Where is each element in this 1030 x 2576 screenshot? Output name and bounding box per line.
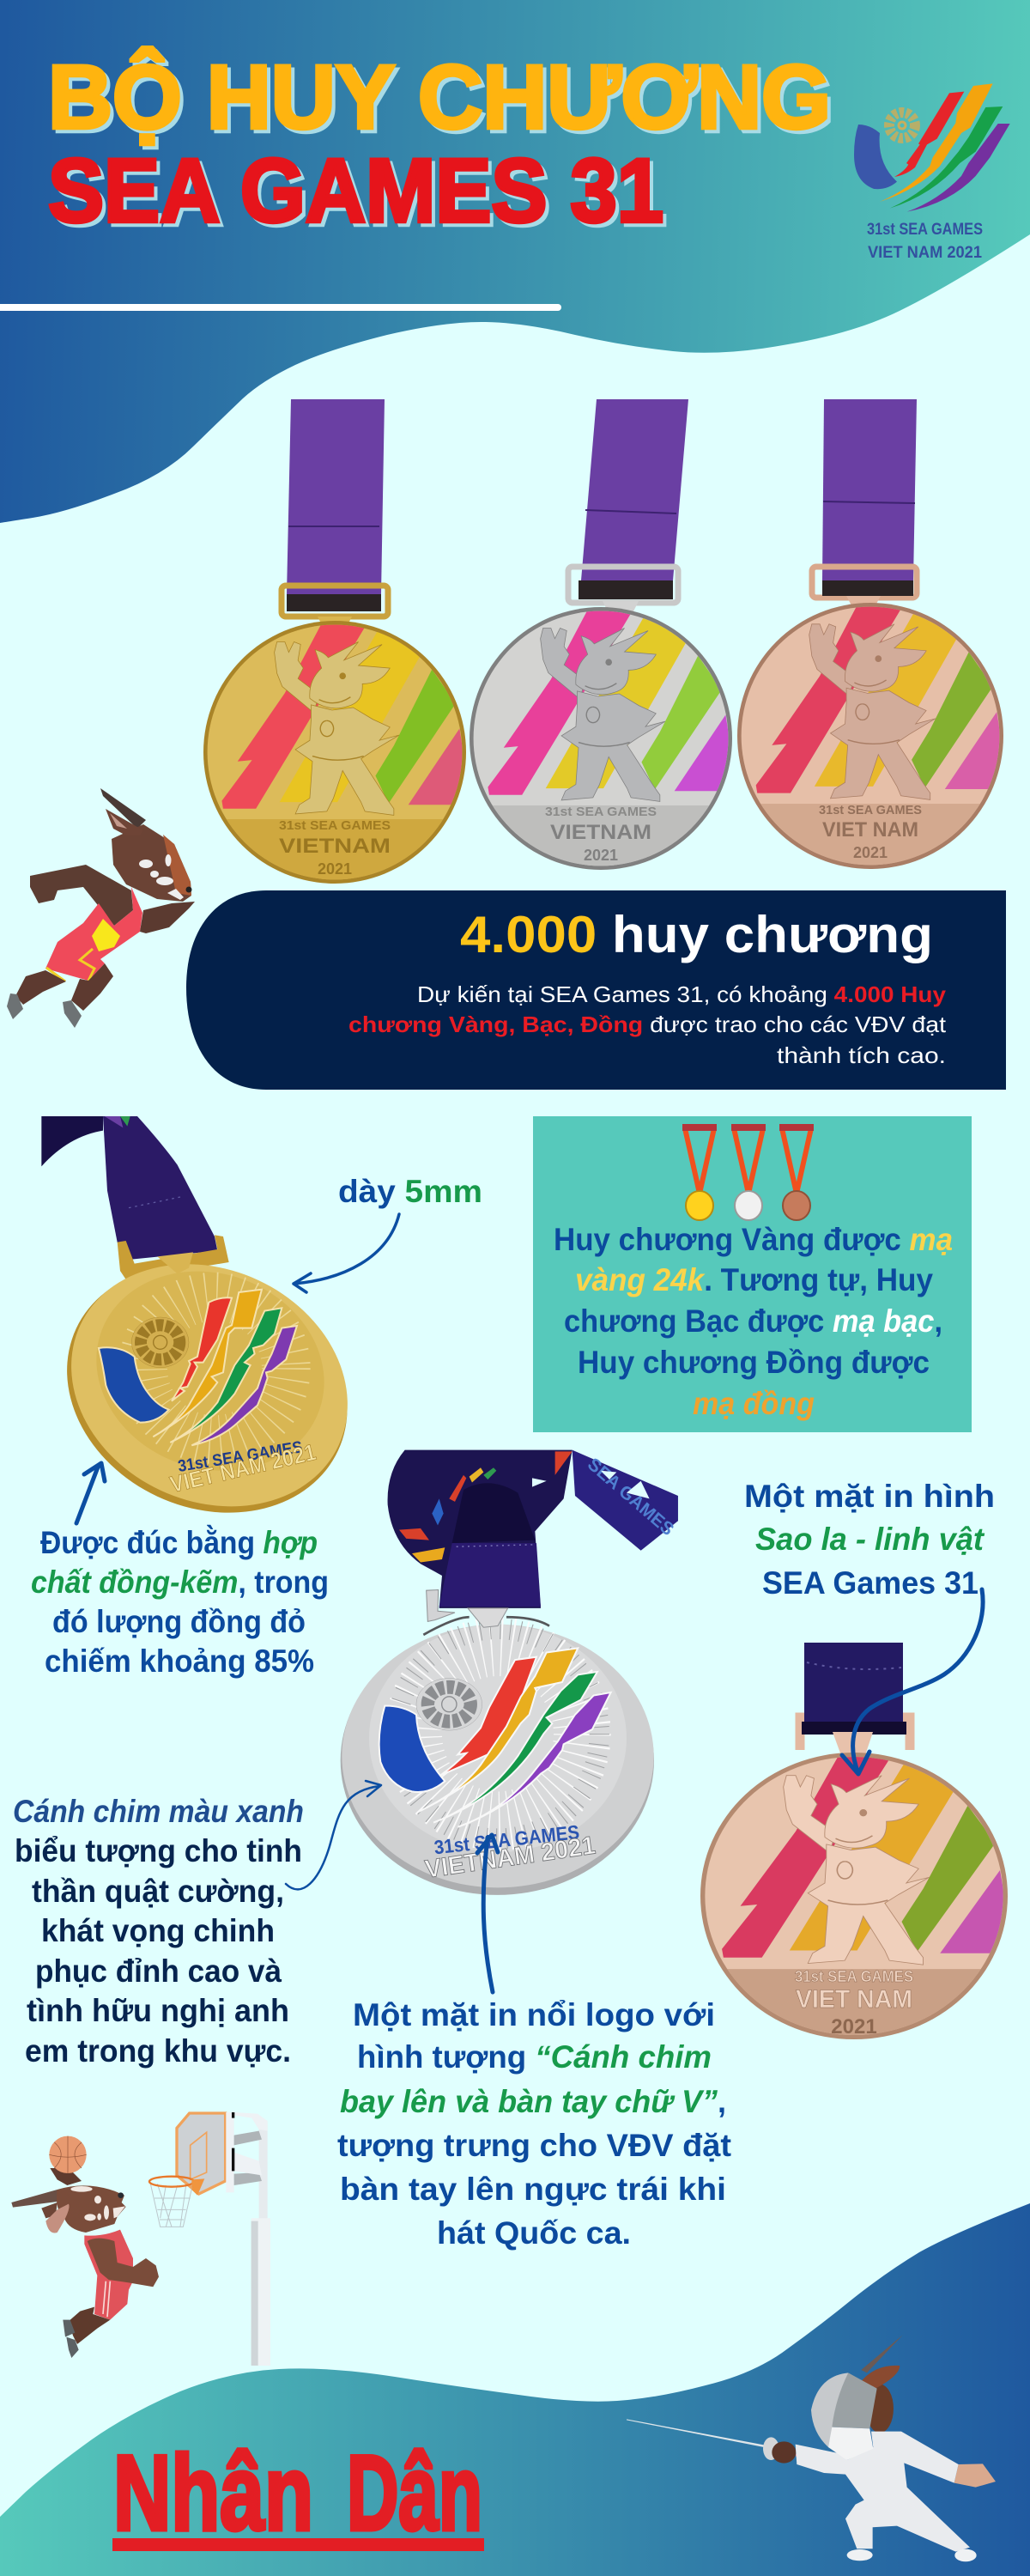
callout: blue wing: tình hữu nghị anh xyxy=(27,1993,289,2028)
mascot: fencer xyxy=(627,2335,996,2561)
bronze medal: VIET NAM xyxy=(822,818,918,841)
silver medal xyxy=(470,399,732,872)
footer wave xyxy=(0,2203,1030,2576)
silver logo medal xyxy=(341,1450,678,1895)
plating text xyxy=(554,1222,953,1421)
title line 1: BỘ HUY CHƯƠNG xyxy=(48,46,831,148)
callout: mascot face: SEA Games 31 xyxy=(762,1565,978,1601)
panel text: Dự kiến tại SEA Games 31, có khoảng 4.000 Huy xyxy=(417,981,947,1007)
bronze mascot medal xyxy=(700,1643,1008,2041)
callout: logo face: bay lên và bàn tay chữ V”, xyxy=(340,2084,726,2119)
panel text xyxy=(348,981,947,1068)
silver medal: VIETNAM xyxy=(550,821,651,844)
callout: logo face: tượng trưng cho VĐV đặt xyxy=(337,2128,731,2163)
bronze medal xyxy=(737,399,1003,871)
plating text: vàng 24k. Tương tự, Huy xyxy=(575,1262,933,1297)
panel heading: 4.000 huy chương xyxy=(460,906,933,963)
arrow xyxy=(76,1463,105,1523)
callout: day 5mm: dày 5mm xyxy=(338,1174,482,1209)
gold medal: 31st SEA GAMES xyxy=(279,818,391,833)
callout: mascot face: Một mặt in hình xyxy=(744,1479,995,1514)
callout: blue wing: thần quật cường, xyxy=(32,1874,284,1909)
panel text: chương Vàng, Bạc, Đồng được trao cho các VĐV đạt xyxy=(348,1012,947,1037)
panel: plating note xyxy=(533,1116,972,1432)
callout: blue wing xyxy=(13,1781,381,2069)
callout: alloy: chất đồng-kẽm, trong xyxy=(31,1564,329,1600)
bronze medal: 2021 xyxy=(853,844,888,861)
callout: mascot face xyxy=(744,1479,995,1601)
bronze mascot medal: 2021 xyxy=(831,2015,877,2038)
icon: three medals xyxy=(682,1124,814,1220)
gold medal xyxy=(203,399,466,885)
callout: alloy: đó lượng đồng đỏ xyxy=(52,1604,306,1639)
silver medal: 31st SEA GAMES xyxy=(545,805,657,819)
silver logo medal: SEA GAMES xyxy=(584,1455,677,1540)
gold logo medal: VIET NAM 2021 xyxy=(167,1439,318,1498)
bronze mascot medal: VIET NAM xyxy=(796,1985,912,2014)
arrow xyxy=(477,1835,498,1992)
mascot: basketball player xyxy=(11,2136,159,2358)
icon: emblem on silver medal xyxy=(416,1678,482,1730)
header rule xyxy=(0,304,561,311)
silver medal inscription: 31st SEA GAMES xyxy=(433,1821,580,1858)
callout: alloy: chiếm khoảng 85% xyxy=(45,1643,314,1679)
silver logo medal: VIETNAM 2021 xyxy=(423,1832,597,1884)
callout: blue wing: Cánh chim màu xanh xyxy=(13,1794,304,1829)
logo: Nhan Dan: Dân xyxy=(347,2434,482,2553)
icon: emblem on gold medal xyxy=(131,1317,189,1368)
callout: alloy xyxy=(31,1463,329,1679)
gold medal: 2021 xyxy=(318,860,352,878)
callout: logo face: Một mặt in nổi logo với xyxy=(353,1997,715,2032)
mascot: sprinter xyxy=(7,788,195,1028)
panel: 4.000 huy chuong xyxy=(186,890,1006,1090)
arrow: to mascot medal xyxy=(842,1589,983,1774)
gold medal: VIETNAM xyxy=(279,835,391,858)
plating text: chương Bạc được mạ bạc, xyxy=(564,1303,942,1339)
basketball hoop xyxy=(149,2112,270,2366)
callout: mascot face: Sao la - linh vật xyxy=(755,1522,985,1557)
arrow xyxy=(294,1214,399,1292)
logo text: 31st SEA GAMES xyxy=(867,221,983,239)
callout: blue wing: em trong khu vực. xyxy=(25,2033,291,2069)
medals: gold, silver, bronze mascot faces xyxy=(203,399,1003,885)
bronze medal: 31st SEA GAMES xyxy=(819,803,922,817)
bronze mascot medal: 31st SEA GAMES xyxy=(795,1968,913,1985)
callout: logo face: bàn tay lên ngực trái khi xyxy=(340,2172,726,2207)
gold medal inscription: 31st SEA GAMES xyxy=(177,1438,304,1476)
plating text: Huy chương Đồng được xyxy=(578,1345,930,1380)
plating text: mạ đồng xyxy=(693,1386,815,1421)
gold logo medal xyxy=(27,1116,388,1558)
title xyxy=(48,46,831,241)
title line 2: SEA GAMES 31 xyxy=(48,141,663,241)
arrow xyxy=(286,1781,381,1889)
callout: blue wing: biểu tượng cho tinh xyxy=(15,1833,302,1868)
logo: SEA Games 31: VIET NAM 2021 xyxy=(868,244,982,262)
panel text: thành tích cao. xyxy=(777,1042,946,1068)
callout: logo face xyxy=(337,1835,731,2251)
callout: day 5mm xyxy=(294,1174,482,1292)
logo: Nhan Dan: Nhân xyxy=(113,2434,313,2553)
header wave xyxy=(0,0,1030,523)
callout: blue wing: phục đỉnh cao và xyxy=(35,1953,282,1989)
callout: alloy: Được đúc bằng hợp xyxy=(40,1524,318,1560)
callout: blue wing: khát vọng chinh xyxy=(41,1913,275,1948)
logo: SEA Games 31 xyxy=(854,83,1010,262)
icon: lotus emblem xyxy=(889,112,915,138)
plating text: Huy chương Vàng được mạ xyxy=(554,1222,953,1257)
callout: logo face: hát Quốc ca. xyxy=(437,2215,631,2251)
silver medal: 2021 xyxy=(584,847,618,864)
callout: logo face: hình tượng “Cánh chim xyxy=(357,2039,712,2075)
